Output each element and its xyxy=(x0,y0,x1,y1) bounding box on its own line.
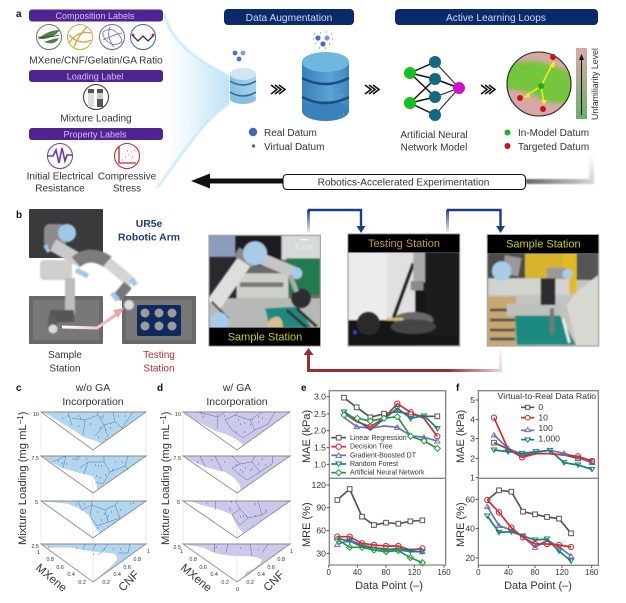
chart: MRE by model: 80 xyxy=(382,568,391,577)
axis ticks: 2.5 xyxy=(173,545,181,551)
axis ticks: 0.2 xyxy=(246,580,254,586)
legend: in-model datum: In-Model Datum xyxy=(518,128,589,139)
axis ticks: 10 xyxy=(175,412,181,418)
chart: MRE by ratio: 20 xyxy=(465,553,475,563)
axis title: mixture loading: ) xyxy=(17,411,29,415)
chart: MAE by model: 120 xyxy=(312,480,326,490)
axis title: CNF: CNF xyxy=(262,569,287,594)
title: w/o GA incorporation: w/o GA xyxy=(76,382,110,394)
chart: MAE by model: 1.5 xyxy=(314,443,326,453)
arrow: blue sample to testing xyxy=(307,210,366,233)
axis ticks: 0.2 xyxy=(78,580,86,586)
chart: MAE by model: 1.0 xyxy=(314,459,326,469)
panel: f data ratio charts xyxy=(455,383,599,592)
legend: real datum: Real Datum xyxy=(264,128,317,139)
icon: GA xyxy=(130,24,156,50)
panel a label: a xyxy=(16,9,22,20)
axis ticks: 0.6 xyxy=(123,565,131,571)
panel d label: d xyxy=(157,383,163,394)
panel: active learning loops xyxy=(395,9,600,154)
axis title: data point: Data Point (–) xyxy=(355,580,423,592)
ternary layer 5 xyxy=(41,501,146,538)
chart: MAE by model: 3.0 xyxy=(314,392,326,402)
ternary layer 5 xyxy=(183,501,290,538)
panel: d ternary stack with GA xyxy=(157,382,293,595)
arrow: chevrons 1 xyxy=(271,85,285,94)
heading: loading label: Loading Label xyxy=(67,72,123,82)
chart: MRE by model: 160 xyxy=(437,568,451,577)
photo: testing station xyxy=(347,233,460,347)
icon: mixture loading vials xyxy=(84,84,108,110)
chart: MRE by model: 0 xyxy=(326,568,331,577)
text: compressive stress: Stress xyxy=(113,184,141,194)
axis ticks: 0.6 xyxy=(199,565,207,571)
axis ticks: 2.5 xyxy=(31,544,39,550)
axis ticks: 0.8 xyxy=(189,557,197,563)
panel b label: b xyxy=(16,210,22,221)
chart: MRE by model: 120 xyxy=(408,568,422,577)
chart: neural network xyxy=(404,56,465,121)
axis ticks xyxy=(173,412,293,593)
heading: data augmentation: Data Augmentation xyxy=(246,13,332,24)
chart: MRE by model: 60 xyxy=(316,526,326,536)
heading: property labels: Property Labels xyxy=(63,130,127,140)
chart: MRE by ratio: 40 xyxy=(465,524,475,534)
axis ticks: 0.4 xyxy=(113,572,121,578)
icon: CNF xyxy=(68,24,92,50)
ternary layer guides xyxy=(41,412,146,582)
callout: robotics-accelerated experimentation xyxy=(283,174,526,190)
axis title: MXene: MXene xyxy=(178,562,214,595)
fan linking labels to database xyxy=(155,12,229,190)
chart: MAE by model xyxy=(312,391,446,490)
chart: MAE by model: 2.5 xyxy=(314,409,326,419)
panel f label: f xyxy=(456,383,460,394)
chart: MRE by model: 90 xyxy=(316,503,326,513)
chart: MAE by ratio: Virtual-to-Real Data Ratio xyxy=(498,391,596,401)
axis ticks: 1 xyxy=(180,549,183,555)
chart: MAE by ratio xyxy=(470,391,598,483)
icon: augmented data points xyxy=(313,32,333,48)
title: w/o GA incorporation: Incorporation xyxy=(62,396,124,408)
axis title: MRE: MRE (%) xyxy=(301,502,313,547)
icon: MXene xyxy=(36,24,62,50)
ternary layer 10 xyxy=(183,412,290,450)
axis ticks: 0.8 xyxy=(46,557,54,563)
arrow: chevrons 3 xyxy=(481,85,495,94)
chart: unfamiliarity level scale xyxy=(576,48,600,120)
text: composition ratio: MXene/CNF/Gelatin/GA Ratio xyxy=(29,56,163,66)
ternary layer 2.5 xyxy=(183,544,290,582)
heading: composition labels: Composition Labels xyxy=(55,11,135,21)
axis ticks: 0.2 xyxy=(102,580,110,586)
icon: compressive stress xyxy=(114,144,140,168)
panel: e model comparison charts xyxy=(301,383,451,592)
axis ticks: 1 xyxy=(37,550,40,556)
text: sample station caption 2: Sample Station xyxy=(506,239,581,251)
robot upper dark stage xyxy=(29,209,103,258)
legend: targeted datum: Targeted Datum xyxy=(518,142,589,153)
chart: MRE by ratio: 80 xyxy=(531,568,540,577)
axis ticks: 0.8 xyxy=(277,557,285,563)
chart: MAE by model: 2.0 xyxy=(314,426,326,436)
text: UR5e robotic arm: UR5e xyxy=(136,219,162,230)
arrow: black feedback arrow xyxy=(191,174,284,188)
panel e label: e xyxy=(301,383,307,394)
icon: real data points xyxy=(233,51,245,61)
chart: MAE by ratio: 5 xyxy=(470,395,475,405)
chart: MRE by model: 30 xyxy=(316,548,326,558)
heading: loading label xyxy=(29,70,163,82)
arrow: chevrons 2 xyxy=(365,85,379,94)
chart: MAE by model: Gradient-Boosted DT xyxy=(350,452,417,459)
chart: MAE by model: Random Forest xyxy=(350,461,398,468)
text: testing station caption: Testing Station xyxy=(368,238,440,250)
heading: property labels xyxy=(29,128,163,140)
axis ticks: 0.6 xyxy=(267,565,275,571)
chart: MAE by ratio: 1 xyxy=(470,473,475,483)
panel: data augmentation xyxy=(224,9,379,153)
text: sample station: Station xyxy=(49,364,81,374)
axis ticks: 1 xyxy=(290,549,293,555)
axis title: CNF: CNF xyxy=(117,569,142,594)
icon: gelatin xyxy=(100,24,124,50)
chart: MAE by ratio: 10 xyxy=(538,412,548,422)
title: w/ GA incorporation: Incorporation xyxy=(206,396,268,408)
chart: MAE by ratio: 3 xyxy=(470,434,475,444)
photo: sample station 1 xyxy=(208,235,321,347)
arrow: blue testing to sample xyxy=(446,210,505,233)
chart: MRE by ratio: 0 xyxy=(476,568,481,577)
chart: MRE by model xyxy=(316,478,451,577)
text: mixture loading: Mixture Loading xyxy=(60,114,132,124)
panel: input labels xyxy=(27,10,163,194)
text: compressive stress: Compressive xyxy=(98,172,156,182)
chart: unfamiliarity level scale: Unfamiliarity Level xyxy=(590,48,600,120)
axis title: mixture loading: Mixture Loading (mg mL xyxy=(17,424,29,545)
ternary layer 10 xyxy=(41,412,146,450)
ternary layer 7.5 xyxy=(41,456,146,493)
chart: MAE by ratio: 2 xyxy=(470,453,475,463)
chart: MRE by ratio xyxy=(465,478,599,577)
panel c label: c xyxy=(16,383,22,394)
chart: MAE by ratio: 100 xyxy=(538,423,553,433)
title: w/ GA incorporation: w/ GA xyxy=(223,382,251,394)
chart: MRE by ratio: 40 xyxy=(504,568,513,577)
text: sample station: Sample xyxy=(48,350,82,361)
axis ticks xyxy=(31,412,150,586)
chart: familiarity map xyxy=(506,52,572,116)
axis title: MRE: MRE (%) xyxy=(455,502,467,547)
icon: electrical resistance xyxy=(48,144,72,168)
callout: robotics-accelerated experimentation: Robotics-Accelerated Experimentation xyxy=(318,178,489,188)
axis ticks: 7.5 xyxy=(31,456,39,462)
text: initial electrical resistance: Initial Electrical xyxy=(27,172,93,182)
text: initial electrical resistance: Resistance xyxy=(35,184,85,194)
icon: large database xyxy=(302,52,349,121)
ternary layer guides xyxy=(183,412,290,582)
axis ticks: 0.6 xyxy=(56,565,64,571)
axis ticks: 1 xyxy=(147,549,150,555)
arrow: pink transfer arrow xyxy=(62,308,124,328)
axis ticks: 0.4 xyxy=(257,572,265,578)
chart: MRE by model: 40 xyxy=(353,568,362,577)
text: testing station: Testing xyxy=(143,350,175,361)
panel: robot schematic xyxy=(29,209,196,374)
axis ticks: 5 xyxy=(35,500,38,506)
chart: MRE by ratio: 60 xyxy=(465,494,475,504)
axis ticks: 5 xyxy=(177,500,180,506)
chart: MAE by ratio: 0 xyxy=(538,402,543,412)
photo: sample station 2 xyxy=(487,234,599,347)
axis title: MXene: MXene xyxy=(33,562,69,595)
axis title: mixture loading: −1 xyxy=(159,415,168,424)
heading: data augmentation xyxy=(224,9,354,25)
chart: MRE by ratio: 160 xyxy=(585,568,599,577)
ternary layer 7.5 xyxy=(183,456,290,493)
ternary layer 2.5 xyxy=(41,544,146,582)
heading: active learning loops: Active Learning Loops xyxy=(446,13,546,24)
chart: MAE by ratio: 4 xyxy=(470,414,475,424)
chart: MAE by model: Artificial Neural Network xyxy=(350,470,425,477)
axis title: MAE: MAE (kPa) xyxy=(301,410,313,463)
axis ticks: 0 xyxy=(236,587,239,593)
axis ticks: 10 xyxy=(33,412,39,418)
testing station tray xyxy=(122,296,196,344)
text: UR5e robotic arm: Robotic Arm xyxy=(118,232,180,244)
heading: active learning loops xyxy=(395,9,598,25)
text: testing station: Station xyxy=(143,364,175,374)
chart: MAE by ratio: 1,000 xyxy=(538,434,560,444)
text: 5 cm scale bar: 5 cm xyxy=(295,242,313,252)
text: artificial neural network model: Artificial Neural xyxy=(400,130,468,141)
text: sample station caption: Sample Station xyxy=(228,331,302,343)
axis title: mixture loading: ) xyxy=(160,411,172,415)
axis ticks: 7.5 xyxy=(173,456,181,462)
chart: MRE by ratio: 120 xyxy=(555,568,569,577)
axis ticks: 0.4 xyxy=(67,572,75,578)
robotic arm xyxy=(40,224,136,334)
axis title: MAE: MAE (kPa) xyxy=(455,410,467,463)
legend: virtual datum: Virtual Datum xyxy=(264,142,324,153)
axis title: mixture loading: −1 xyxy=(16,415,25,424)
axis ticks: 0.2 xyxy=(221,580,229,586)
text: artificial neural network model: Network Model xyxy=(401,142,467,154)
sample station tray xyxy=(29,296,103,344)
axis title: data point: Data Point (–) xyxy=(504,580,572,592)
axis ticks: 0.4 xyxy=(210,572,218,578)
arrow: red return to sample xyxy=(304,348,502,372)
axis title: mixture loading: Mixture Loading (mg mL xyxy=(160,424,172,545)
chart: MAE by model: Linear Regression xyxy=(350,435,407,442)
arrow: robotics loop return line xyxy=(526,155,594,184)
icon: small database xyxy=(230,68,256,104)
heading: composition labels xyxy=(29,10,163,22)
panel: c ternary stack without GA xyxy=(16,382,150,595)
axis ticks: 0.8 xyxy=(133,557,141,563)
chart: MAE by model: Decision Tree xyxy=(350,444,393,451)
